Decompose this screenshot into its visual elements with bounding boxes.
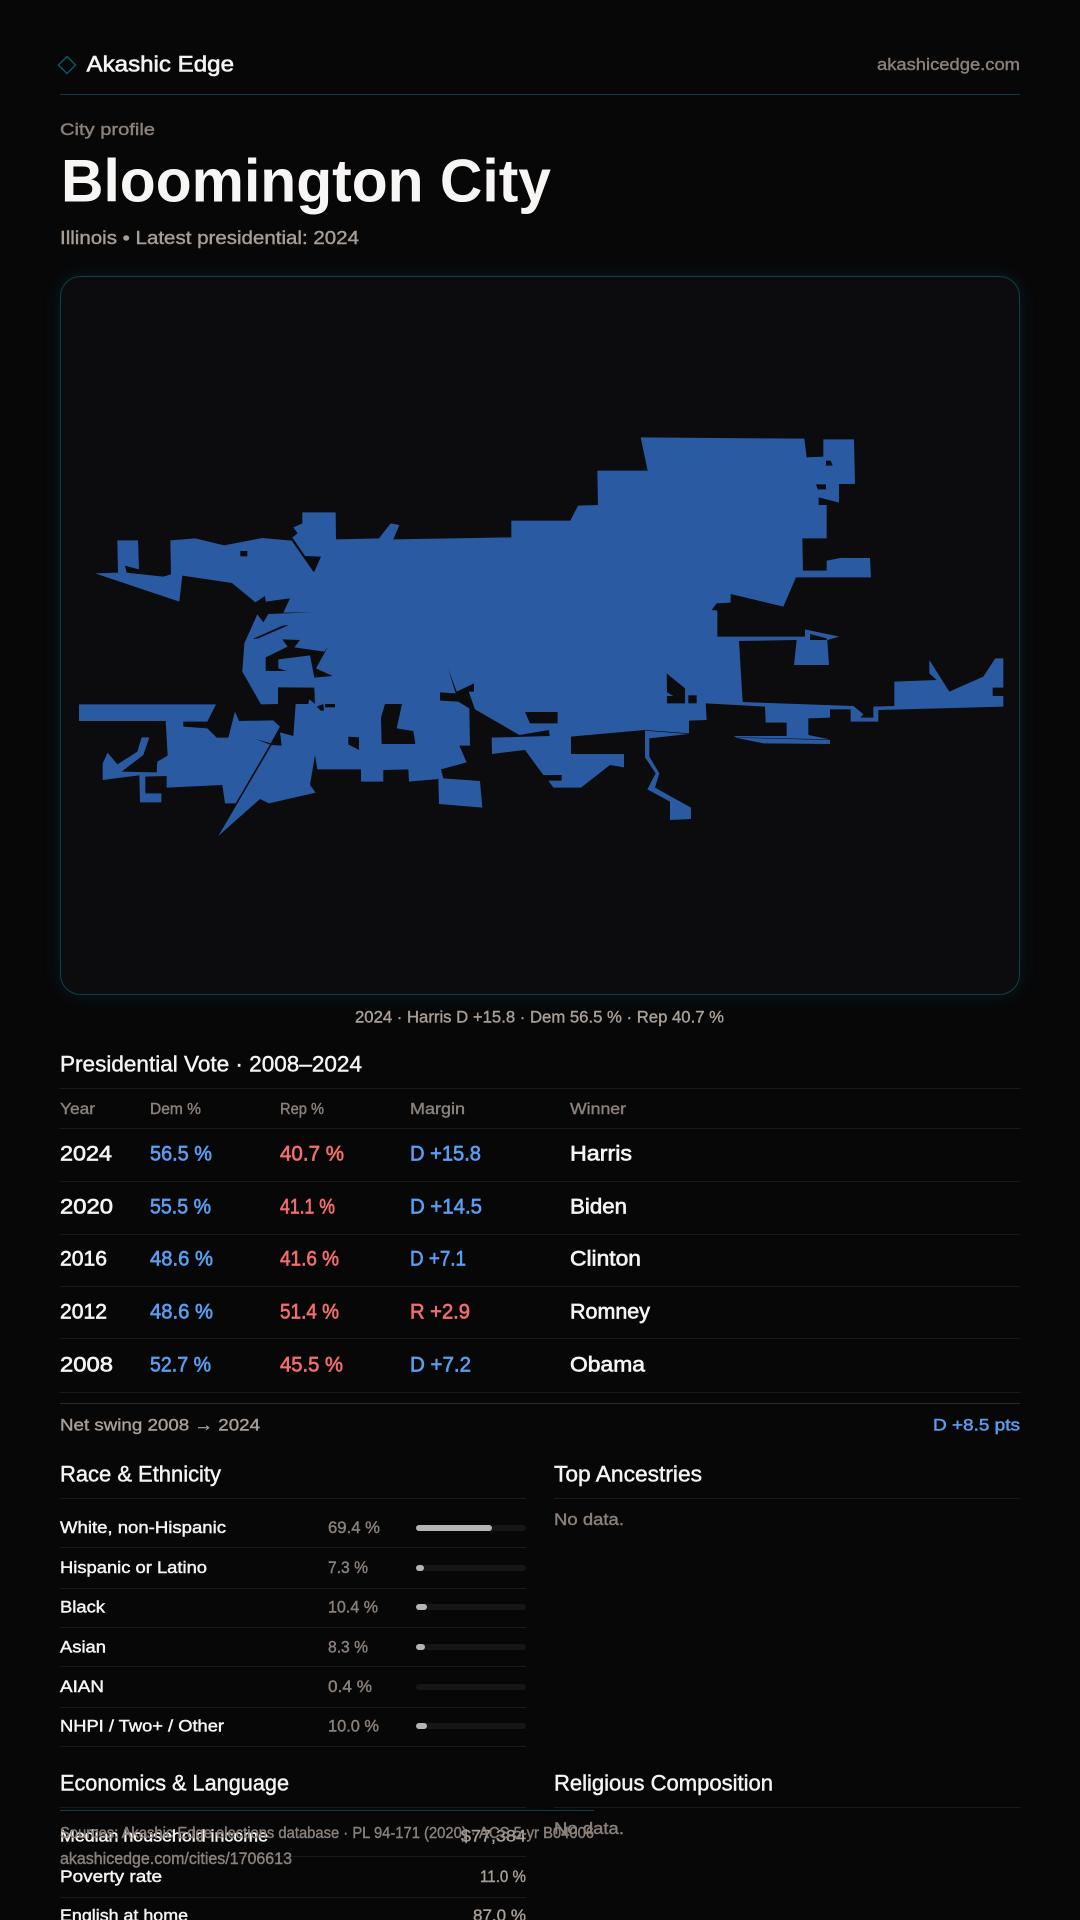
row 2020: 41.1 % xyxy=(280,1196,335,1218)
row 2020: D +14.5 xyxy=(410,1196,482,1218)
row 2016 xyxy=(60,1248,641,1270)
row 2020 xyxy=(60,1196,627,1218)
header xyxy=(58,52,1020,95)
section heading: Presidential Vote · 2008–2024 xyxy=(60,1052,362,1076)
table header xyxy=(60,1101,627,1118)
row 2008: 52.7 % xyxy=(150,1354,211,1376)
row 2008: D +7.2 xyxy=(410,1354,471,1376)
table header: Winner xyxy=(570,1101,627,1118)
row 2012: R +2.9 xyxy=(410,1300,470,1324)
title: Bloomington City xyxy=(61,148,552,214)
table header: Margin xyxy=(410,1101,465,1118)
row 2020: 55.5 % xyxy=(150,1196,211,1218)
map: city boundary xyxy=(79,437,1003,836)
icon: brand diamond xyxy=(58,56,76,74)
subtitle: Illinois • Latest presidential: 2024 xyxy=(60,228,359,248)
row 2020: 2020 xyxy=(60,1196,113,1218)
row: black: 10.4 % xyxy=(328,1598,378,1616)
section heading: Economics & Language xyxy=(60,1770,289,1796)
row 2012: 2012 xyxy=(60,1300,107,1324)
title block xyxy=(60,120,552,248)
panel: presidential vote table xyxy=(60,1052,1020,1434)
row: english xyxy=(60,1906,526,1920)
row: aian: AIAN xyxy=(60,1677,104,1696)
empty note: No data. xyxy=(554,1510,624,1529)
row: poverty: Poverty rate xyxy=(60,1867,162,1886)
row: other: NHPI / Two+ / Other xyxy=(60,1716,224,1736)
row: income xyxy=(60,1826,526,1846)
row: other xyxy=(60,1716,526,1736)
row: other: 10.0 % xyxy=(328,1716,379,1736)
row 2016: 41.6 % xyxy=(280,1248,339,1270)
row 2012 xyxy=(60,1300,651,1324)
row: white xyxy=(60,1518,526,1537)
row: white: White, non-Hispanic xyxy=(60,1518,227,1537)
section heading: Top Ancestries xyxy=(554,1462,702,1486)
row: asian: Asian xyxy=(60,1638,106,1656)
row 2024: 56.5 % xyxy=(150,1142,212,1166)
row 2008: Obama xyxy=(570,1354,645,1376)
row 2016: 48.6 % xyxy=(150,1248,213,1270)
row 2008: 2008 xyxy=(60,1354,113,1376)
row: black xyxy=(60,1598,526,1616)
row 2012: 48.6 % xyxy=(150,1300,213,1324)
row 2020: Biden xyxy=(570,1196,627,1218)
panel: economics and language xyxy=(60,1770,526,1920)
section heading: Race & Ethnicity xyxy=(60,1462,221,1486)
row 2008: 45.5 % xyxy=(280,1354,343,1376)
row: asian xyxy=(60,1638,526,1656)
map caption: 2024 · Harris D +15.8 · Dem 56.5 % · Rep 40.7 % xyxy=(355,1008,724,1026)
row 2016: D +7.1 xyxy=(410,1248,466,1270)
brand name: Akashic Edge xyxy=(86,52,234,76)
site url: akashicedge.com xyxy=(877,55,1020,74)
row 2024: 2024 xyxy=(60,1142,112,1166)
panel: city map xyxy=(60,276,1020,994)
row 2012: Romney xyxy=(570,1300,651,1324)
footer xyxy=(60,1810,594,1868)
row: income: $77,384 xyxy=(461,1826,526,1846)
net swing: Net swing 2008 → 2024 xyxy=(60,1416,260,1434)
row: black: Black xyxy=(60,1598,106,1616)
row 2016: 2016 xyxy=(60,1248,107,1270)
header rule xyxy=(60,94,1020,95)
net swing: D +8.5 pts xyxy=(933,1416,1020,1434)
row: asian: 8.3 % xyxy=(328,1638,368,1656)
table header: Year xyxy=(60,1101,96,1118)
table header: Dem % xyxy=(150,1101,201,1118)
section heading: Religious Composition xyxy=(554,1770,773,1796)
row: aian xyxy=(60,1677,526,1696)
row: hispanic: 7.3 % xyxy=(328,1558,368,1577)
row: poverty xyxy=(60,1867,526,1886)
empty note: No data. xyxy=(554,1819,624,1838)
row 2024: Harris xyxy=(570,1142,632,1166)
page url: akashicedge.com/cities/1706613 xyxy=(60,1849,292,1868)
eyebrow: City profile xyxy=(60,120,155,139)
row 2024 xyxy=(60,1142,632,1166)
sources note: Sources: Akashic Edge elections database · PL 94-171 (2020) · ACS 5-yr B04006 xyxy=(60,1825,594,1842)
row: white: 69.4 % xyxy=(328,1518,380,1537)
row: hispanic: Hispanic or Latino xyxy=(60,1558,207,1577)
row 2012: 51.4 % xyxy=(280,1300,339,1324)
row 2016: Clinton xyxy=(570,1248,641,1270)
panel: race and ethnicity xyxy=(60,1462,526,1747)
row 2024: D +15.8 xyxy=(410,1142,481,1166)
row: poverty: 11.0 % xyxy=(480,1867,526,1886)
net swing xyxy=(60,1416,1020,1434)
row 2008 xyxy=(60,1354,645,1376)
panel: religious composition xyxy=(554,1770,1020,1838)
row: aian: 0.4 % xyxy=(328,1677,372,1696)
table header: Rep % xyxy=(280,1101,324,1118)
row 2024: 40.7 % xyxy=(280,1142,344,1166)
row: hispanic xyxy=(60,1558,526,1577)
panel: top ancestries xyxy=(554,1462,1020,1529)
row: income: Median household income xyxy=(60,1826,268,1846)
